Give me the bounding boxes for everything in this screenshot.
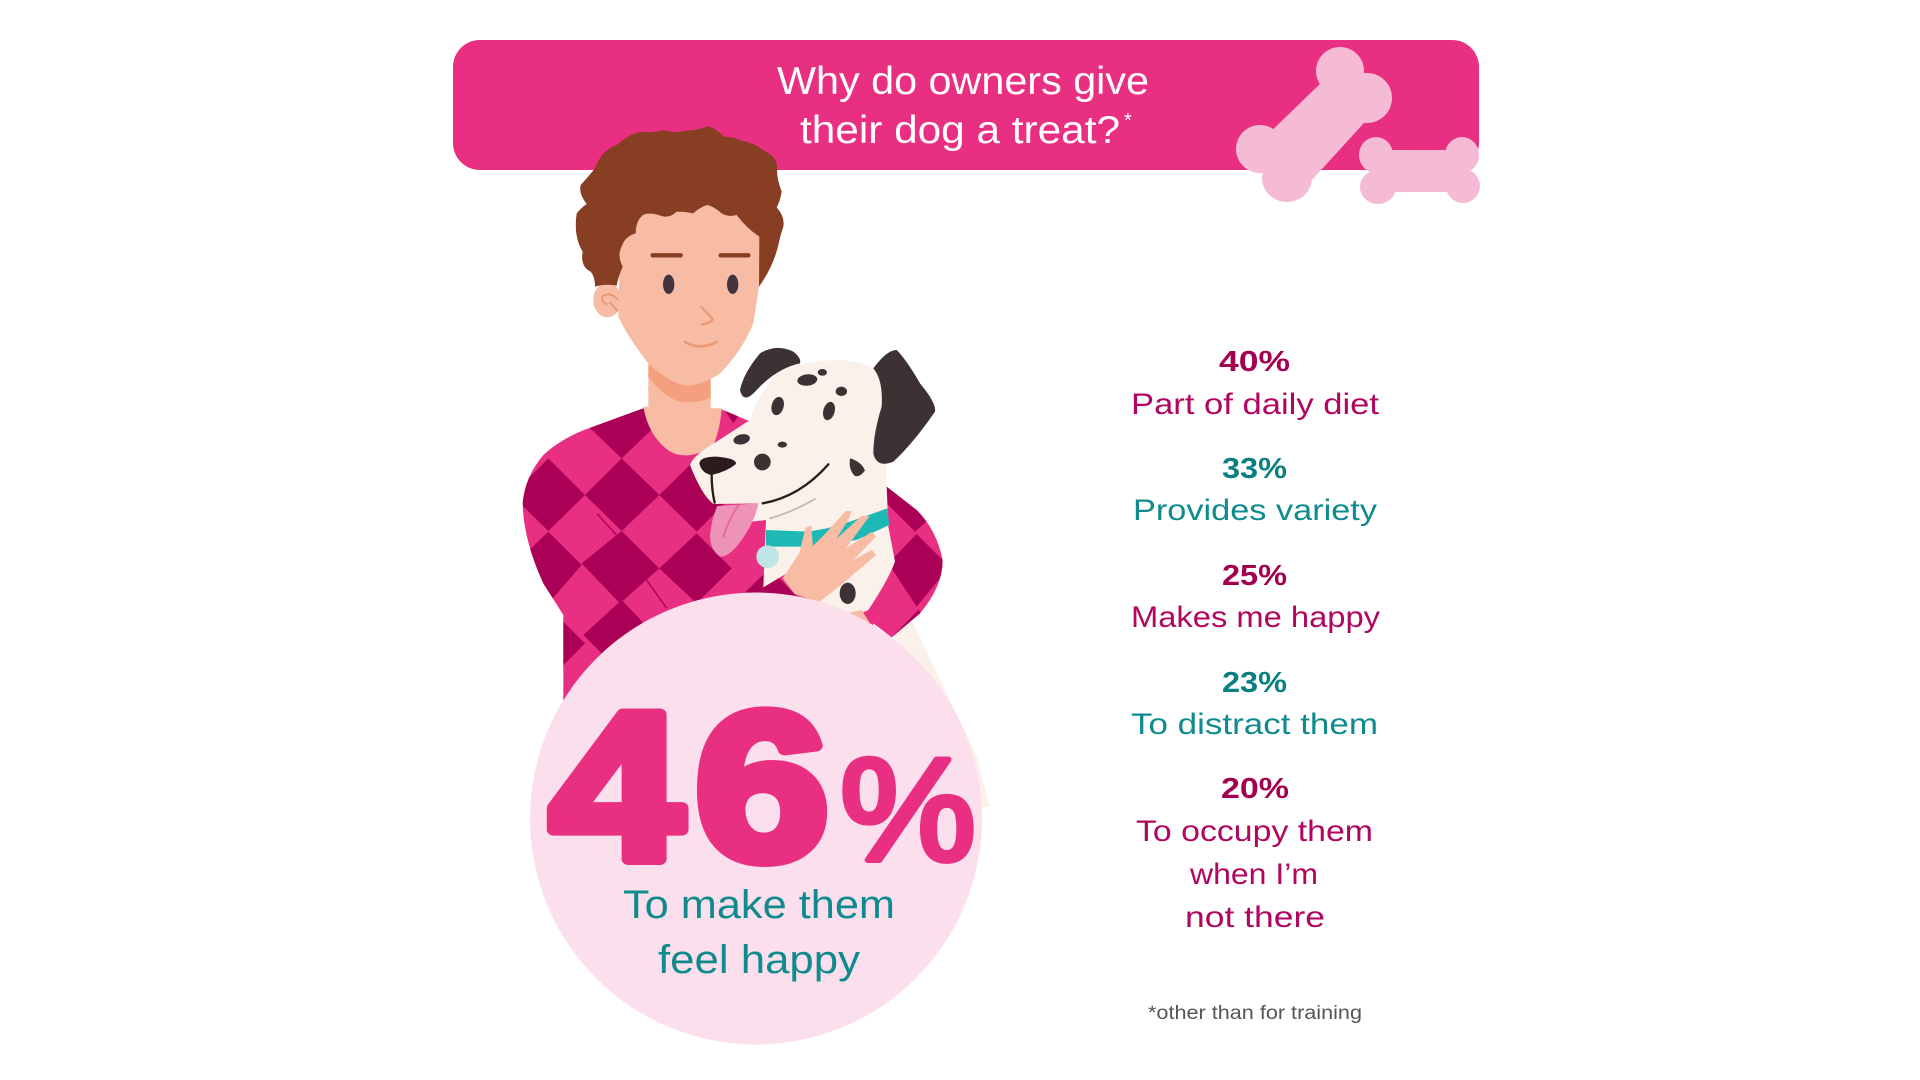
banner [453, 40, 1479, 170]
shirt [522, 406, 943, 701]
illustration: owner and dog [500, 126, 990, 807]
headline stat label: To make them [623, 883, 895, 927]
mouth [685, 342, 717, 346]
dog hind body behind circle [885, 610, 990, 807]
stat: 23% [1131, 667, 1378, 741]
neck [648, 353, 711, 433]
stat: 33% [1133, 453, 1377, 527]
stat: 25% [1131, 560, 1380, 634]
headline stat label: feel happy [658, 938, 860, 982]
stat: 20% [1136, 773, 1373, 934]
stat: 40%: Part of daily diet [1131, 388, 1380, 421]
heading: their dog a treat? [800, 109, 1120, 152]
eyebrows [653, 249, 748, 262]
heading: Why do owners give [777, 60, 1149, 103]
footnote: *other than for training [1148, 1003, 1362, 1024]
icon: large bone [1236, 47, 1392, 202]
stat: 20%: not there [1185, 901, 1325, 934]
stat: 23%: To distract them [1131, 708, 1378, 741]
stat: 20%: To occupy them [1136, 815, 1373, 848]
headline stat: 46%: 4 [550, 669, 683, 904]
dog spots [732, 369, 865, 604]
dog nose [699, 457, 736, 475]
stat list [1131, 346, 1380, 934]
neck shadow [648, 365, 711, 403]
headline stat: 46%: 6 [695, 669, 829, 904]
owner head [576, 126, 784, 433]
wrist [850, 610, 870, 623]
stat: 25%: Makes me happy [1131, 601, 1380, 634]
dog right ear [873, 350, 935, 464]
heading [777, 60, 1149, 152]
stat: 40%: 40% [1219, 346, 1290, 378]
owner hand [783, 512, 875, 602]
face [618, 203, 760, 386]
dog tongue [710, 503, 758, 557]
stat: 33%: Provides variety [1133, 494, 1377, 527]
stat: 33%: 33% [1222, 453, 1287, 485]
headline stat: 46%: % [840, 728, 976, 891]
ear [593, 283, 621, 317]
dog collar [766, 508, 889, 547]
stat: 20%: 20% [1221, 773, 1289, 805]
icon: small bone [1359, 137, 1480, 204]
stat circle [530, 592, 982, 1044]
headline stat: 46% [550, 669, 976, 904]
headline stat label [623, 883, 895, 982]
dog [690, 348, 935, 623]
stat: 40% [1131, 346, 1380, 421]
dog left ear [740, 348, 800, 397]
dog mouth [712, 464, 828, 518]
eyes [663, 275, 738, 294]
stat: 20%: when I’m [1189, 858, 1318, 891]
dog head and chest [690, 360, 895, 617]
hair [576, 126, 784, 287]
stat: 23%: 23% [1222, 667, 1287, 699]
stat: 25%: 25% [1222, 560, 1287, 592]
nose [702, 307, 713, 325]
dog tag [756, 545, 779, 568]
heading: * [1124, 110, 1132, 132]
neckline [643, 407, 722, 455]
